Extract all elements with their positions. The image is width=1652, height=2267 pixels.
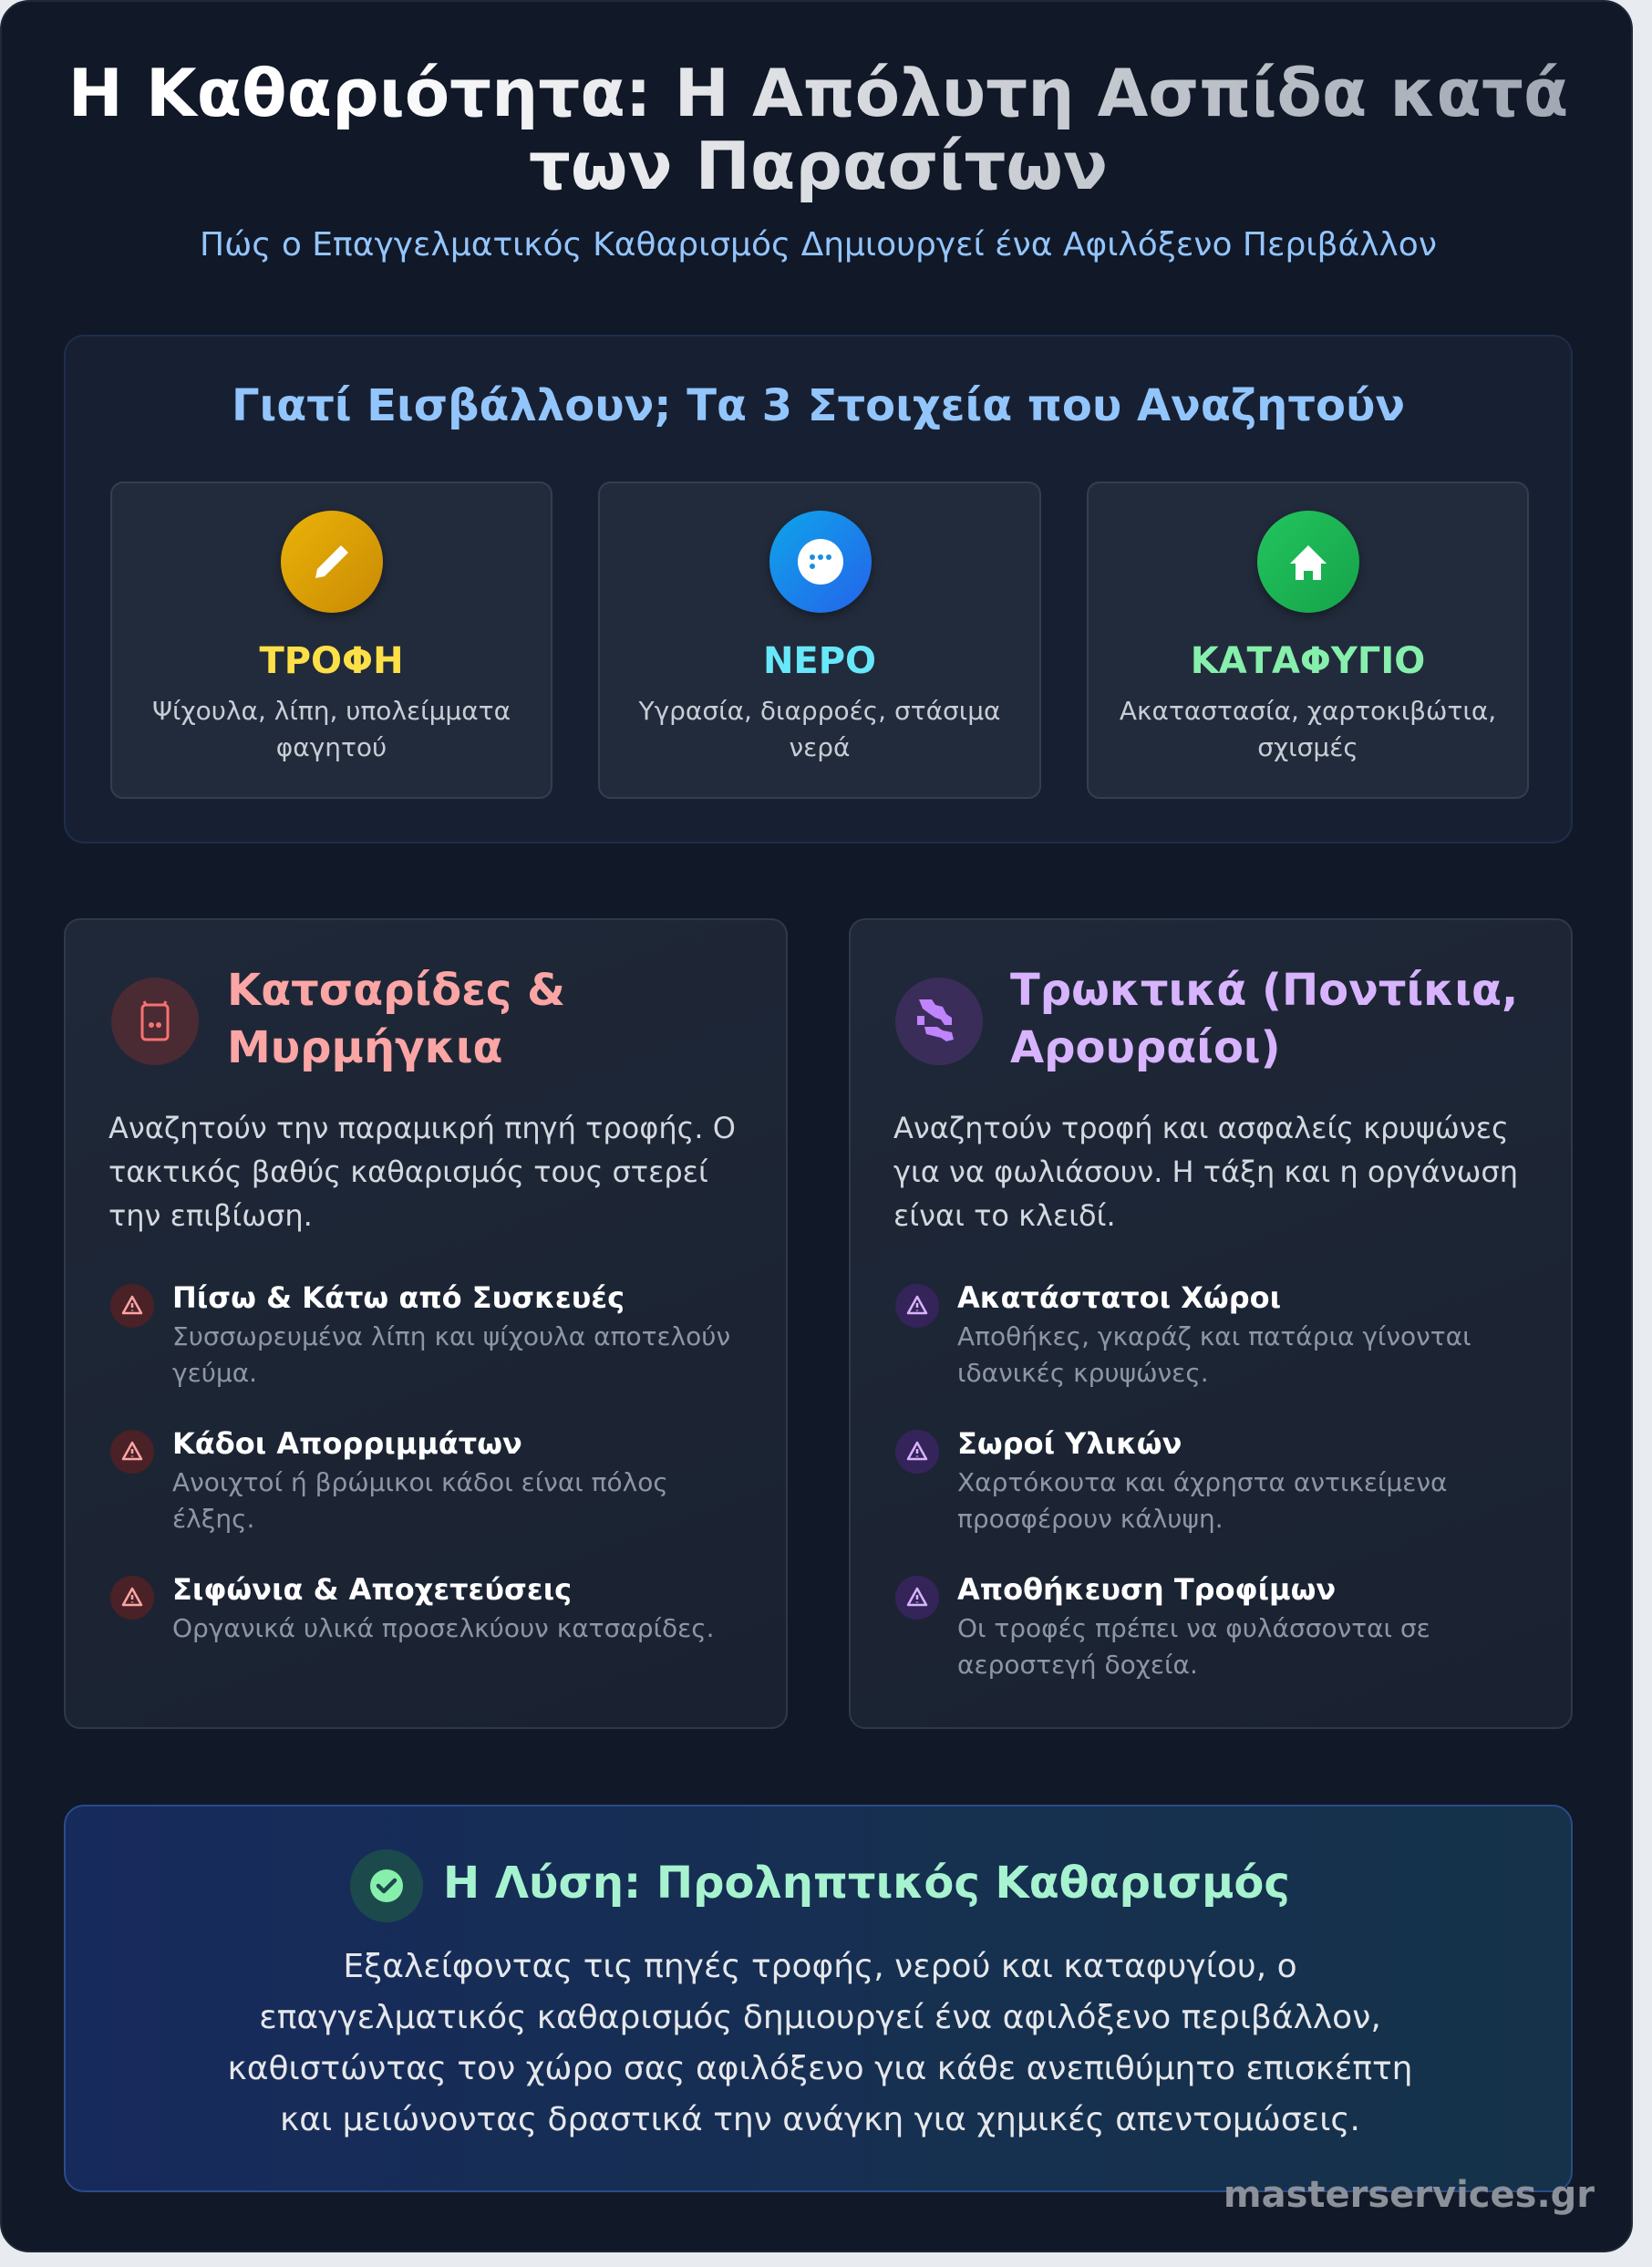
panel: cockroaches & ants: Σιφώνια & Αποχετεύσεις <box>172 1572 572 1607</box>
panel: rodents: Αποθήκευση Τροφίμων <box>957 1572 1336 1607</box>
heading: Κατσαρίδες & <box>227 965 565 1016</box>
description: Αναζητούν τροφή και ασφαλείς κρυψώνες για να φωλιάσουν. Η τάξη και η οργάνωση είναι το κλειδί. <box>893 1111 1518 1233</box>
title: των Παρασίτων <box>529 128 1108 204</box>
icon: rodent <box>895 978 983 1065</box>
heading text: Η Λύση: Προληπτικός Καθαρισμός <box>443 1858 1290 1909</box>
heading: Αρουραίοι) <box>1010 1022 1281 1073</box>
icon: house <box>1257 511 1359 613</box>
description: Ακαταστασία, χαρτοκιβώτια, σχισμές <box>1120 696 1496 762</box>
card: shelter <box>1087 481 1529 799</box>
panel: cockroaches & ants: Ανοιχτοί ή βρώμικοι κάδοι είναι πόλος έλξης. <box>172 1467 668 1534</box>
panel: cockroaches & ants: Οργανικά υλικά προσελκύουν κατσαρίδες. <box>172 1613 715 1643</box>
list item <box>895 1572 1430 1680</box>
description: Αναζητούν την παραμικρή πηγή τροφής. Ο τακτικός βαθύς καθαρισμός τους στερεί την επιβίωση. <box>108 1111 736 1233</box>
panel: cockroaches & ants: Πίσω & Κάτω από Συσκευές <box>172 1280 625 1315</box>
card: water <box>598 481 1041 799</box>
list item <box>895 1426 1447 1534</box>
label: ΝΕΡΟ <box>763 640 876 682</box>
panel: rodents <box>849 918 1573 1729</box>
panel heading: Γιατί Εισβάλλουν; Τα 3 Στοιχεία που Αναζητούν <box>232 380 1405 431</box>
heading: Τρωκτικά (Ποντίκια, <box>1010 965 1518 1016</box>
panel: cockroaches & ants: Κάδοι Απορριμμάτων <box>172 1426 522 1461</box>
panel: rodents: Ακατάστατοι Χώροι <box>957 1280 1281 1315</box>
heading with check icon <box>350 1849 1290 1922</box>
heading <box>1010 965 1518 1073</box>
body text: και μειώνοντας δραστικά την ανάγκη για χημικές απεντομώσεις. <box>280 2101 1360 2138</box>
list item <box>895 1280 1471 1388</box>
icon: drop <box>769 511 872 613</box>
list item <box>110 1572 715 1643</box>
panel: cockroaches & ants: Συσσωρευμένα λίπη και ψίχουλα αποτελούν γεύμα. <box>172 1321 730 1388</box>
description: Υγρασία, διαρροές, στάσιμα νερά <box>638 696 1001 762</box>
label: ΚΑΤΑΦΥΓΙΟ <box>1191 640 1425 682</box>
subtitle: Πώς ο Επαγγελματικός Καθαρισμός Δημιουργεί ένα Αφιλόξενο Περιβάλλον <box>200 226 1437 264</box>
icon: check <box>350 1849 423 1922</box>
card: food <box>110 481 552 799</box>
heading <box>227 965 565 1073</box>
body text: επαγγελματικός καθαρισμός δημιουργεί ένα αφιλόξενο περιβάλλον, <box>259 1999 1381 2036</box>
icon: bug <box>111 978 199 1065</box>
body text: καθιστώντας τον χώρο σας αφιλόξενο για κάθε ανεπιθύμητο επισκέπτη <box>228 2050 1413 2087</box>
watermark: masterservices.gr <box>1224 2174 1595 2216</box>
panel: cockroaches & ants <box>64 918 788 1729</box>
panel: why they invade <box>64 335 1573 844</box>
panel: rodents: Χαρτόκουτα και άχρηστα αντικείμενα προσφέρουν κάλυψη. <box>957 1467 1447 1534</box>
panel: rodents: Σωροί Υλικών <box>957 1426 1182 1461</box>
label: ΤΡΟΦΗ <box>259 640 404 682</box>
body text <box>228 1948 1413 2138</box>
icon: pencil <box>281 511 383 613</box>
panel: rodents: Αποθήκες, γκαράζ και πατάρια γίνονται ιδανικές κρυψώνες. <box>957 1321 1471 1388</box>
panel: solution <box>64 1805 1573 2192</box>
heading: Μυρμήγκια <box>227 1022 503 1073</box>
description: Ψίχουλα, λίπη, υπολείμματα φαγητού <box>152 696 511 762</box>
list item <box>110 1426 668 1534</box>
title: Η Καθαριότητα: Η Απόλυτη Ασπίδα κατά <box>68 55 1568 131</box>
panel: rodents: Οι τροφές πρέπει να φυλάσσονται σε αεροστεγή δοχεία. <box>957 1613 1430 1680</box>
list item <box>110 1280 730 1388</box>
body text: Εξαλείφοντας τις πηγές τροφής, νερού και καταφυγίου, ο <box>343 1948 1297 1985</box>
title <box>2 57 1635 202</box>
